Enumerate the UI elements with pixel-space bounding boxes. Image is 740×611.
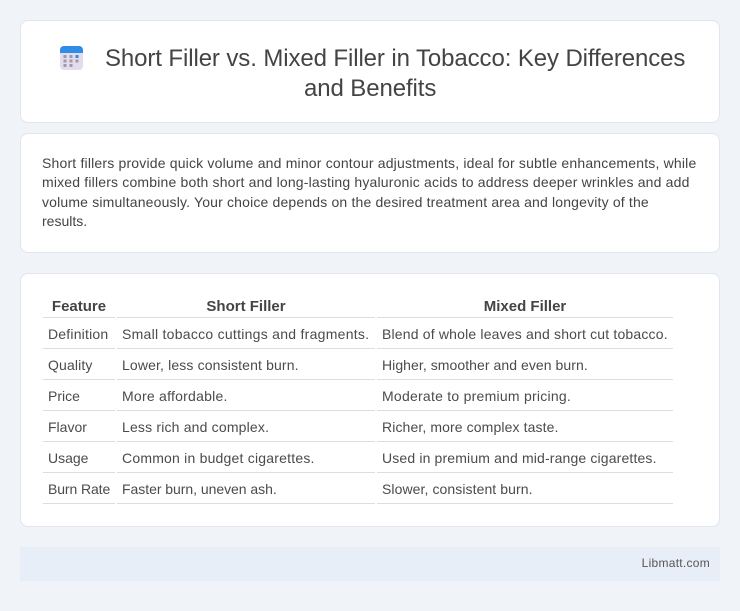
row: flavor — [48, 419, 558, 435]
panel: title — [20, 20, 720, 123]
row: definition: Small tobacco cuttings and fragments. — [122, 326, 369, 342]
row: definition — [48, 326, 668, 342]
row: flavor: Richer, more complex taste. — [382, 419, 558, 435]
row: price — [48, 388, 571, 404]
row: definition: Blend of whole leaves and short cut tobacco. — [382, 326, 668, 342]
row: burn rate — [48, 481, 533, 497]
intro text: Short fillers provide quick volume and minor contour adjustments, ideal for subtle enhancements, while — [42, 155, 696, 171]
row: flavor: Less rich and complex. — [122, 419, 269, 435]
row: usage: Common in budget cigarettes. — [122, 450, 315, 466]
row: usage — [48, 450, 657, 466]
table header — [52, 298, 566, 315]
row: definition: Definition — [48, 326, 108, 342]
footer bar — [20, 547, 720, 581]
icon: calendar — [60, 46, 83, 70]
row: price: More affordable. — [122, 388, 228, 404]
panel: comparison table — [20, 273, 720, 527]
row: burn rate: Faster burn, uneven ash. — [122, 481, 277, 497]
table header: Short Filler — [206, 298, 286, 315]
panel: intro paragraph — [20, 133, 720, 253]
title text — [105, 45, 685, 102]
table header: Mixed Filler — [484, 298, 566, 315]
title text: and Benefits — [304, 75, 436, 102]
intro text: mixed fillers combine both short and long-lasting hyaluronic acids to address deeper wrinkles and add — [42, 174, 690, 190]
row: quality — [48, 357, 588, 373]
intro text: results. — [42, 213, 87, 229]
row: burn rate: Burn Rate — [48, 481, 110, 497]
row: usage: Used in premium and mid-range cigarettes. — [382, 450, 657, 466]
intro text: volume simultaneously. Your choice depends on the desired treatment area and longevity of the — [42, 194, 649, 210]
row: price: Moderate to premium pricing. — [382, 388, 571, 404]
row: usage: Usage — [48, 450, 88, 466]
footer text: Libmatt.com — [642, 556, 710, 570]
title text: Short Filler vs. Mixed Filler in Tobacco: Key Differences — [105, 45, 685, 72]
row: quality: Higher, smoother and even burn. — [382, 357, 588, 373]
row: price: Price — [48, 388, 80, 404]
row: burn rate: Slower, consistent burn. — [382, 481, 533, 497]
row: flavor: Flavor — [48, 419, 87, 435]
intro text — [42, 155, 696, 229]
table header: Feature — [52, 298, 106, 315]
row: quality: Quality — [48, 357, 93, 373]
row: quality: Lower, less consistent burn. — [122, 357, 299, 373]
